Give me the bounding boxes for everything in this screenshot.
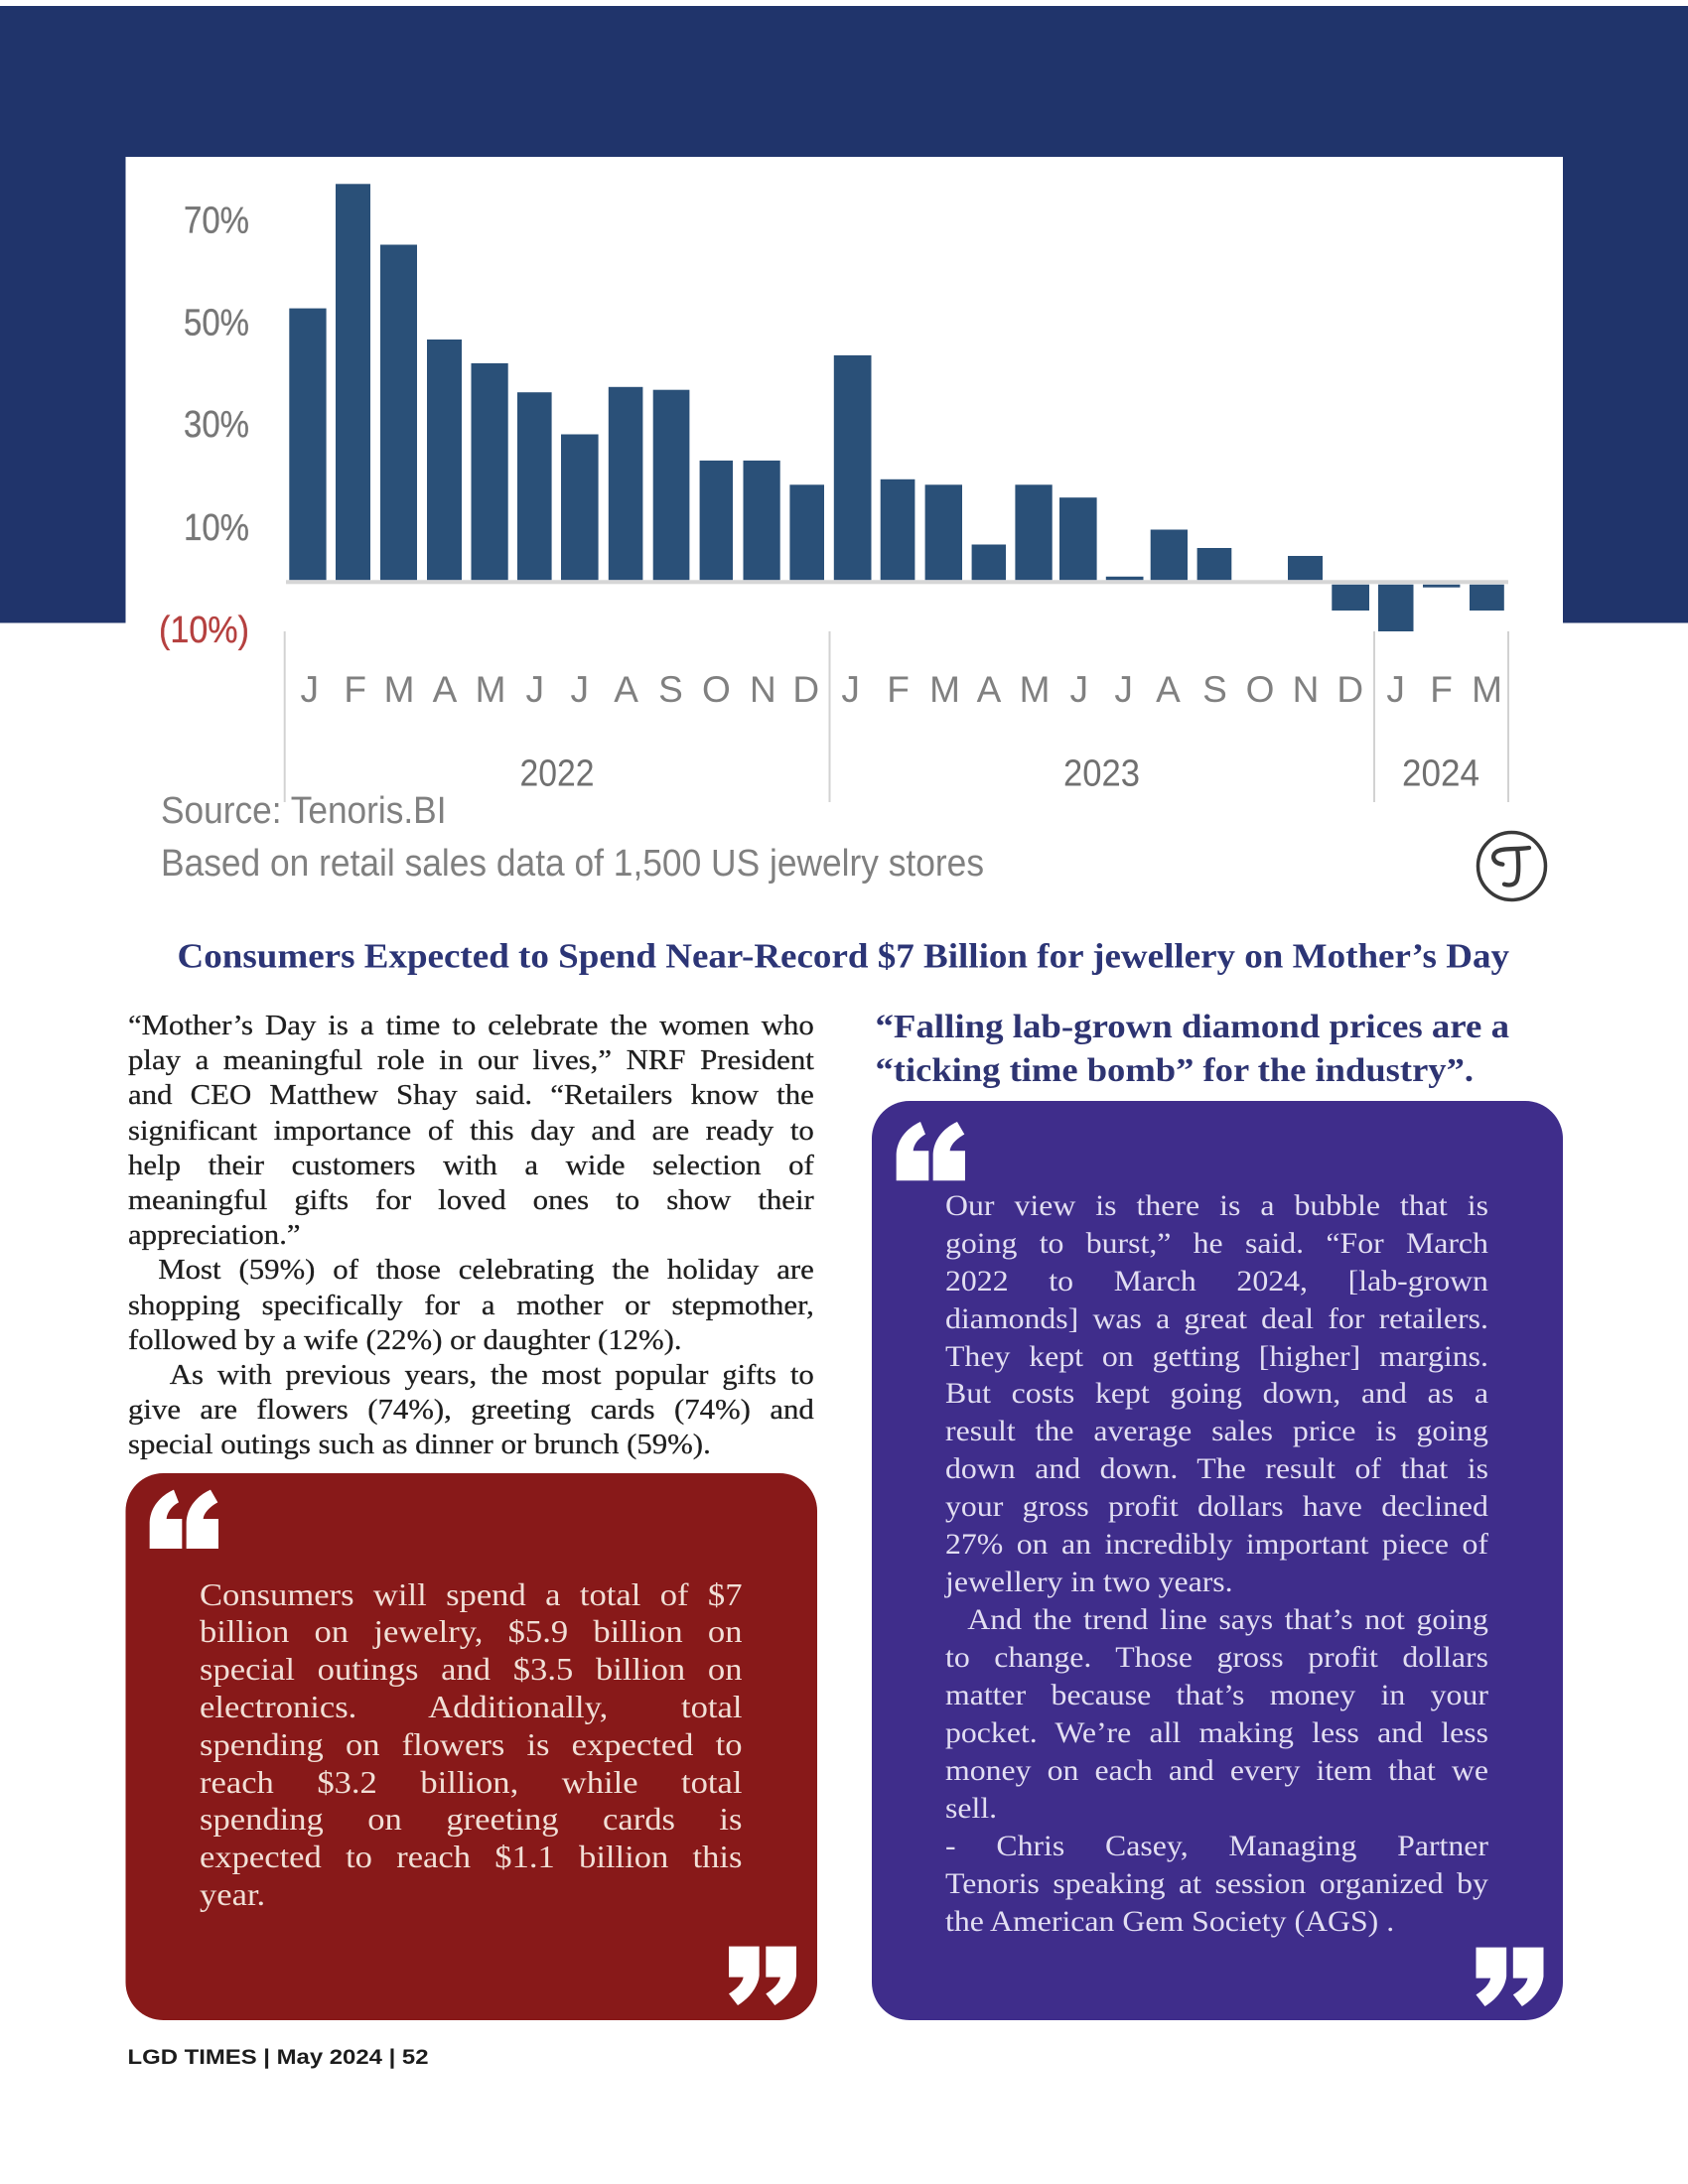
- text block: red callout quote: spending on greeting cards is: [200, 1801, 742, 1837]
- chart source note: Source: Tenoris.BI: [161, 790, 447, 832]
- text block: red callout quote: electronics. Additionally, total: [200, 1689, 742, 1724]
- month labels: F: [1430, 669, 1453, 710]
- month labels: O: [1246, 669, 1274, 710]
- month labels: M: [929, 669, 960, 710]
- text block: purple callout quote: the American Gem Society (AGS) .: [945, 1905, 1394, 1938]
- text block: Mother's Day article: give are flowers (74%), greeting cards (74%) and: [127, 1395, 813, 1426]
- month labels: M: [476, 669, 505, 710]
- text block: purple callout quote: 2022 to March 2024, [lab-grown: [945, 1265, 1488, 1297]
- text block: purple callout quote: going to burst,” he said. “For March: [945, 1227, 1488, 1260]
- month labels: F: [344, 669, 366, 710]
- month labels: [300, 669, 1502, 710]
- month labels: J: [570, 669, 589, 710]
- year separator ticks: [284, 631, 1509, 802]
- year labels: 2022: [520, 752, 594, 794]
- text block: red callout quote: special outings and $3.5 billion on: [200, 1651, 742, 1687]
- text block: purple callout quote: And the trend line says that’s not going: [967, 1603, 1488, 1636]
- text block: Mother's Day article: appreciation.”: [127, 1220, 300, 1251]
- panel: red callout box: [125, 1473, 817, 2020]
- month labels: A: [614, 669, 638, 710]
- y-axis labels: 10%: [184, 507, 249, 549]
- text block: purple callout quote: sell.: [945, 1792, 997, 1825]
- text block: purple callout quote: pocket. We’re all making less and less: [945, 1716, 1488, 1749]
- text block: purple callout quote: result the average sales price is going: [945, 1415, 1488, 1447]
- month labels: J: [526, 669, 544, 710]
- y-axis labels: [159, 201, 249, 651]
- text block: purple callout quote: - Chris Casey, Managing Partner: [945, 1830, 1488, 1862]
- month labels: A: [977, 669, 1002, 710]
- subheading: ticking time bomb: “Falling lab-grown diamond prices are a: [876, 1009, 1509, 1045]
- icon: Tenoris logo: [1477, 832, 1545, 899]
- text block: purple callout quote: Tenoris speaking at session organized by: [945, 1867, 1488, 1900]
- text block: purple callout quote: matter because that’s money in your: [945, 1679, 1488, 1711]
- text block: Mother's Day article: “Mother’s Day is a time to celebrate the women who: [127, 1011, 813, 1041]
- text block: purple callout quote: They kept on getting [higher] margins.: [945, 1340, 1488, 1372]
- text block: red callout quote: billion on jewelry, $5.9 billion on: [200, 1613, 742, 1649]
- icon: red box opening quote: [150, 1490, 218, 1549]
- panel: purple callout box: [872, 1101, 1563, 2020]
- month labels: D: [1336, 669, 1363, 710]
- text block: purple callout quote: diamonds] was a great deal for retailers.: [945, 1302, 1488, 1335]
- text block: red callout quote: expected to reach $1.1 billion this: [200, 1839, 742, 1874]
- footer: LGD TIMES | May 2024 | 52: [127, 2046, 429, 2069]
- text block: Mother's Day article: and CEO Matthew Shay said. “Retailers know the: [127, 1080, 813, 1111]
- chart source note: [161, 790, 984, 885]
- text block: purple callout quote: money on each and every item that we: [945, 1754, 1488, 1787]
- panel: chart background: [125, 157, 1563, 911]
- icon: red box closing quote: [729, 1947, 796, 2005]
- y-axis labels: (10%): [159, 610, 249, 651]
- month labels: N: [750, 669, 776, 710]
- text block: purple callout quote: [944, 1189, 1488, 1938]
- month labels: M: [384, 669, 414, 710]
- text block: Mother's Day article: followed by a wife (22%) or daughter (12%).: [127, 1325, 681, 1356]
- month labels: J: [1114, 669, 1133, 710]
- text block: purple callout quote: 27% on an incredibly important piece of: [945, 1528, 1488, 1561]
- month labels: S: [658, 669, 683, 710]
- navy header band: [0, 6, 1688, 623]
- y-axis labels: 70%: [184, 201, 249, 242]
- month labels: M: [1472, 669, 1502, 710]
- text block: red callout quote: year.: [200, 1876, 265, 1912]
- text block: red callout quote: reach $3.2 billion, while total: [200, 1764, 742, 1800]
- text block: Mother's Day article: Most (59%) of those celebrating the holiday are: [158, 1255, 813, 1286]
- text block: Mother's Day article: shopping specifically for a mother or stepmother,: [127, 1291, 813, 1320]
- text block: Mother's Day article: play a meaningful role in our lives,” NRF President: [127, 1045, 813, 1076]
- month labels: J: [1069, 669, 1088, 710]
- text block: purple callout quote: your gross profit dollars have declined: [945, 1490, 1488, 1523]
- bar chart: monthly change bars: [289, 184, 1504, 631]
- month labels: A: [433, 669, 458, 710]
- month labels: N: [1293, 669, 1319, 710]
- icon: purple box opening quote: [897, 1122, 965, 1180]
- subheading: ticking time bomb: [876, 1009, 1509, 1089]
- month labels: M: [1020, 669, 1050, 710]
- text block: Mother's Day article: significant importance of this day and are ready to: [127, 1116, 813, 1147]
- year labels: [520, 752, 1479, 794]
- text block: purple callout quote: to change. Those gross profit dollars: [945, 1641, 1488, 1674]
- month labels: D: [792, 669, 819, 710]
- text block: Mother's Day article: help their customers with a wide selection of: [127, 1151, 813, 1181]
- month labels: F: [887, 669, 910, 710]
- y-axis labels: 30%: [184, 404, 249, 446]
- text block: purple callout quote: Our view is there is a bubble that is: [945, 1189, 1488, 1222]
- text block: Mother's Day article: meaningful gifts for loved ones to show their: [127, 1185, 813, 1216]
- month labels: S: [1202, 669, 1227, 710]
- chart source note: Based on retail sales data of 1,500 US jewelry stores: [161, 843, 984, 885]
- y-axis labels: 50%: [184, 303, 249, 344]
- text block: Mother's Day article: special outings such as dinner or brunch (59%).: [127, 1430, 710, 1460]
- chart axis line: [286, 580, 1508, 584]
- subheading: ticking time bomb: “ticking time bomb” for the industry”.: [876, 1052, 1474, 1089]
- text block: Mother's Day article: As with previous years, the most popular gifts to: [169, 1360, 813, 1391]
- month labels: J: [300, 669, 319, 710]
- text block: red callout quote: Consumers will spend a total of $7: [200, 1576, 742, 1612]
- text block: purple callout quote: jewellery in two years.: [945, 1566, 1232, 1598]
- text block: red callout quote: [200, 1576, 742, 1912]
- year labels: 2024: [1402, 752, 1479, 794]
- icon: purple box closing quote: [1476, 1948, 1543, 2006]
- main heading: Consumers Expected to Spend Near-Record $7 Billion for jewellery on Mother’s Day: [177, 937, 1510, 975]
- month labels: J: [1386, 669, 1405, 710]
- text block: purple callout quote: But costs kept going down, and as a: [945, 1377, 1488, 1410]
- month labels: O: [702, 669, 731, 710]
- text block: purple callout quote: down and down. The result of that is: [945, 1452, 1488, 1485]
- month labels: J: [841, 669, 860, 710]
- text block: red callout quote: spending on flowers is expected to: [200, 1726, 742, 1762]
- text block: Mother's Day article: [127, 1011, 814, 1460]
- year labels: 2023: [1063, 752, 1140, 794]
- month labels: A: [1156, 669, 1181, 710]
